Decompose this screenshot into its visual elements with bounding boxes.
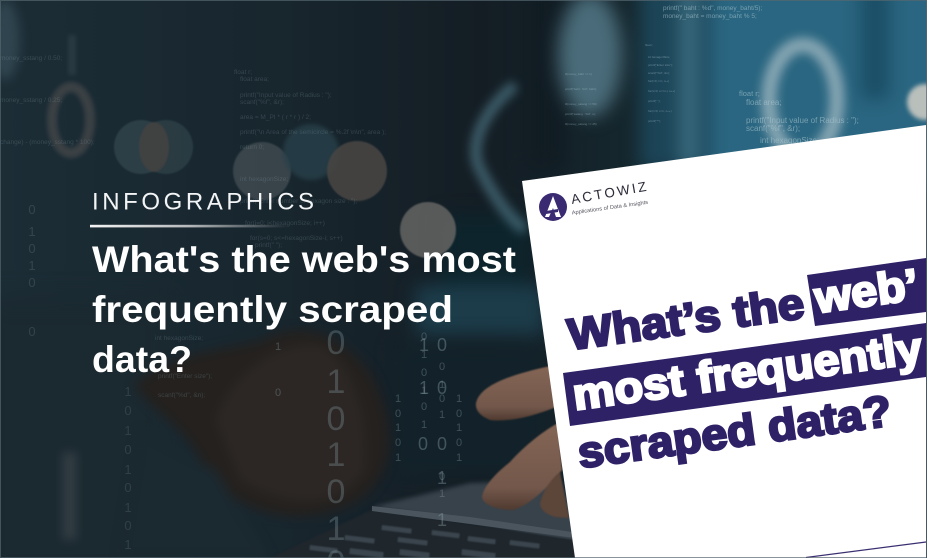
binary digit columns: 1 bbox=[439, 409, 445, 421]
faint source code on screen: change) - (money_sstang * 100); bbox=[0, 139, 95, 146]
page headline line 3: scraped data? bbox=[575, 386, 894, 478]
faint source code on screen: money_sstang / 0.25; bbox=[0, 97, 62, 104]
code on blue monitor: if(money_satang >= 25) bbox=[565, 122, 597, 126]
binary digit columns: 1 bbox=[439, 379, 445, 391]
page bottom rule bbox=[806, 542, 926, 558]
code on blue monitor: printf("*"); bbox=[648, 119, 661, 123]
binary digit columns: 0 bbox=[437, 434, 447, 454]
logo wordmark: ACTOWIZ bbox=[570, 179, 647, 207]
code on blue monitor: printf(" "); bbox=[648, 99, 661, 103]
faint source code on screen: printf("Input value of Radius : "); bbox=[240, 92, 332, 99]
highlight box: web's bbox=[807, 258, 926, 326]
main title: What's the web's most bbox=[92, 239, 516, 280]
binary digit columns: 0 bbox=[421, 367, 427, 379]
binary digit columns: 1 bbox=[419, 335, 429, 355]
code on blue monitor: printf("baht : %d", baht); bbox=[565, 87, 597, 91]
code on blue monitor: int hexagonSize; bbox=[648, 55, 670, 59]
binary digit columns: 1 bbox=[124, 384, 132, 399]
binary digit columns: 1 bbox=[28, 224, 36, 239]
binary digit columns: 0 bbox=[28, 202, 36, 217]
code on blue monitor: float area; bbox=[746, 98, 782, 107]
binary digit columns: 0 bbox=[421, 401, 427, 413]
binary digit columns: 1 bbox=[395, 422, 401, 434]
binary digit columns: 1 bbox=[437, 468, 447, 488]
logo: Actowiz bbox=[539, 179, 649, 221]
binary digit columns: 0 bbox=[437, 335, 447, 355]
logo mark bbox=[539, 193, 567, 221]
faint source code on screen: printf("\n Area of the semicircle = %.2f \n\n", area ); bbox=[240, 129, 386, 136]
binary digit columns: 1 bbox=[395, 452, 401, 464]
binary digit columns: 0 bbox=[439, 471, 445, 483]
faint source code on screen: for(i=0; i<hexagonSize; i++) bbox=[245, 220, 325, 227]
faint source code on screen bbox=[0, 55, 386, 399]
binary digit columns: 0 bbox=[395, 408, 401, 420]
faint source code on screen: money_sstang / 0.50; bbox=[0, 55, 62, 62]
code on blue monitor: printf("satang : %d", s); bbox=[565, 112, 596, 116]
heading label: INFOGRAPHICS: INFOGRAPHICS bbox=[92, 188, 318, 216]
faint source code on screen: scanf("%d", &n); bbox=[158, 392, 205, 399]
binary digit columns: 0 bbox=[439, 393, 445, 405]
code on blue monitor bbox=[565, 5, 859, 145]
binary digit columns: 1 bbox=[421, 349, 427, 361]
binary digit columns: 0 bbox=[124, 518, 132, 533]
binary digit columns: 1 bbox=[327, 510, 345, 548]
faint source code on screen: printf("Enter size"); bbox=[158, 373, 212, 380]
code on blue monitor: for(c=0; c<n; c++) bbox=[648, 109, 672, 113]
face outline bbox=[476, 85, 525, 230]
binary digit columns: 0 bbox=[124, 442, 132, 457]
binary digit columns: 1 bbox=[421, 385, 427, 397]
binary digit columns: 1 bbox=[124, 500, 132, 515]
page headline line 2: most frequently bbox=[570, 324, 926, 420]
code on blue monitor: printf("Enter size"); bbox=[648, 63, 673, 67]
binary digit columns: 1 bbox=[421, 419, 427, 431]
page headline line 1: What’s the bbox=[565, 279, 807, 360]
code on blue monitor: for(s=0; s<=n-i; s++) bbox=[648, 89, 675, 93]
binary digit columns: 0 bbox=[327, 324, 345, 362]
code on blue monitor: int hexagonSize; bbox=[760, 136, 819, 145]
underline rule bbox=[90, 225, 290, 227]
binary digit columns: 0 bbox=[124, 403, 132, 418]
keyboard bbox=[270, 506, 578, 558]
binary digit columns: 0 bbox=[327, 473, 345, 511]
binary digit columns: 1 bbox=[419, 378, 429, 398]
faint source code on screen: printf("Enter number of hexagon size : "); bbox=[240, 198, 358, 205]
fingers bbox=[476, 366, 569, 518]
binary digit columns: 0 bbox=[28, 241, 36, 256]
code on blue monitor: scanf("%f", &r); bbox=[746, 124, 800, 133]
main title: data? bbox=[92, 339, 192, 380]
binary digit columns: 1 bbox=[456, 393, 462, 405]
code on blue monitor: float r; bbox=[645, 43, 654, 47]
binary digit columns: 0 bbox=[28, 324, 36, 339]
binary digit columns: 1 bbox=[124, 423, 132, 438]
page headline word: web's: web’ bbox=[811, 260, 921, 323]
binary digit columns: 0 bbox=[275, 387, 281, 399]
binary digit columns: 1 bbox=[456, 422, 462, 434]
main title bbox=[92, 239, 516, 380]
binary digit columns: 1 bbox=[395, 393, 401, 405]
logo tagline: Applications of Data & Insights bbox=[571, 200, 649, 216]
faint source code on screen: area = M_PI * ( r * r ) / 2; bbox=[240, 114, 311, 121]
keyboard hand, dark bbox=[120, 330, 390, 558]
faint source code on screen: for(s=0; s<=hexagonSize-i; s++) bbox=[250, 235, 343, 242]
binary digit columns: 1 bbox=[327, 363, 345, 401]
faint source code on screen: int hexagonSize; bbox=[155, 335, 203, 342]
binary digit columns: 0 bbox=[418, 434, 428, 454]
code on blue monitor: printf("Input value of Radius : "); bbox=[746, 116, 859, 125]
main title: frequently scraped bbox=[92, 289, 453, 330]
tilted infographic page preview bbox=[522, 125, 926, 558]
binary digit columns: 1 bbox=[275, 341, 281, 353]
code on blue monitor: printf(" baht : %d", money_baht/5); bbox=[663, 5, 762, 12]
code on blue monitor: scanf("%d", &n); bbox=[648, 71, 670, 75]
binary digit columns: 1 bbox=[28, 258, 36, 273]
faint source code on screen: int hexagonSize; bbox=[240, 176, 288, 183]
code on blue monitor: money_baht = money_baht % 5; bbox=[663, 13, 757, 20]
binary digit columns: 1 bbox=[437, 510, 447, 530]
binary digit columns: 0 bbox=[439, 361, 445, 373]
white page bbox=[522, 125, 926, 558]
faint source code on screen: return 0; bbox=[240, 144, 264, 151]
binary digit columns: 1 bbox=[456, 452, 462, 464]
binary digit columns: 1 bbox=[439, 488, 445, 500]
highlight bar: most frequently bbox=[563, 323, 926, 426]
bokeh circles bbox=[114, 84, 927, 258]
code on blue monitor: float r; bbox=[739, 89, 760, 98]
binary digit columns: 1 bbox=[124, 537, 132, 552]
faint source code on screen: scanf("%f", &r); bbox=[240, 99, 284, 106]
blue monitor glow bbox=[395, 0, 927, 475]
binary digit columns: 0 bbox=[456, 437, 462, 449]
binary digit columns: 1 bbox=[124, 462, 132, 477]
binary digit columns: 0 bbox=[28, 275, 36, 290]
faint source code on screen: float area; bbox=[240, 76, 269, 83]
faint source code on screen: float r; bbox=[234, 69, 252, 76]
binary digit columns: 1 bbox=[327, 436, 345, 474]
faint source code on screen: printf(" "); bbox=[255, 242, 282, 249]
code on blue monitor: if(money_baht >= 1) bbox=[565, 72, 592, 76]
blurred digit ring bbox=[769, 45, 837, 155]
binary digit columns: 0 bbox=[124, 480, 132, 495]
code on blue monitor: for(i=0; i<n; i++) bbox=[648, 79, 669, 83]
binary digit columns: 0 bbox=[421, 331, 427, 343]
binary digit columns bbox=[28, 202, 462, 558]
binary digit columns: 0 bbox=[327, 400, 345, 438]
binary digit columns: 0 bbox=[395, 437, 401, 449]
blurred digit one bbox=[62, 452, 77, 540]
binary digit columns: 0 bbox=[437, 378, 447, 398]
code on blue monitor: if(money_satang >= 50) bbox=[565, 102, 597, 106]
lower-left shadow bbox=[0, 300, 170, 558]
laptop deck bbox=[372, 480, 580, 545]
binary digit columns: 0 bbox=[456, 408, 462, 420]
